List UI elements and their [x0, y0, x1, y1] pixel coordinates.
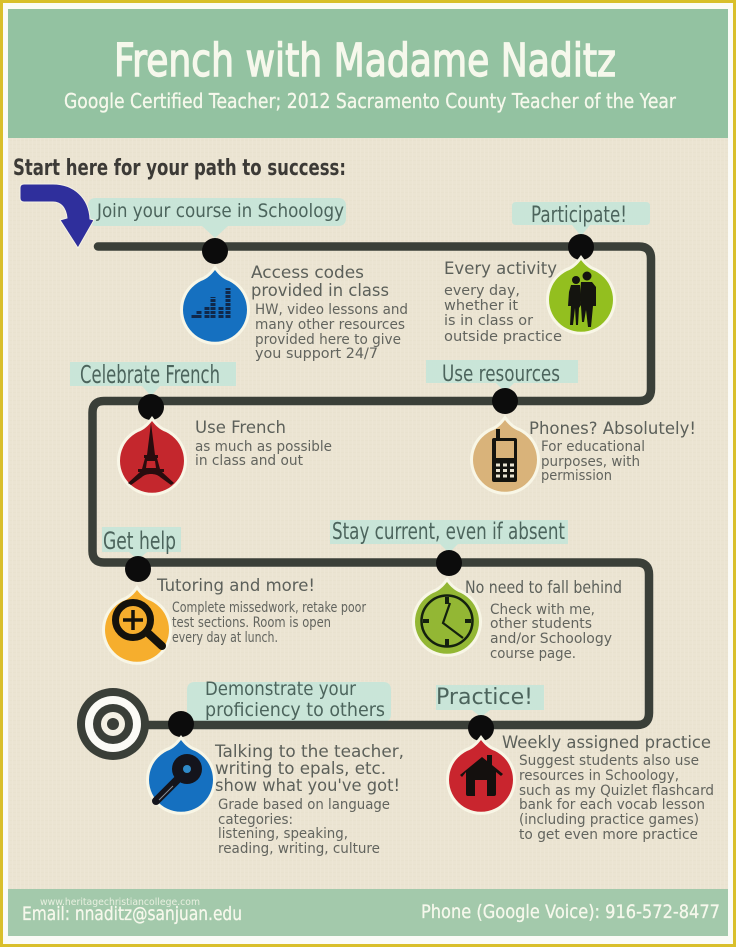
icon: house — [449, 740, 513, 812]
text: access codes: many other resources — [255, 317, 405, 333]
text: access codes: provided in class — [251, 281, 389, 301]
icon: eiffel tower — [120, 421, 184, 493]
footer banner — [8, 889, 728, 936]
text: tutoring: Tutoring and more! — [156, 576, 315, 596]
label: get help: Get help — [103, 527, 176, 555]
icon: people — [549, 260, 613, 332]
text: use french: Use French — [195, 418, 286, 438]
label: practice: Practice! — [436, 685, 533, 710]
icon: signal bars — [183, 270, 247, 342]
text: weekly practice: resources in Schoology, — [519, 768, 679, 784]
text: no need to fall behind: Check with me, — [490, 602, 595, 618]
label: join: Join your course in Schoology — [96, 200, 344, 222]
text: weekly practice: to get even more practice — [519, 827, 698, 843]
text: access codes: HW, video lessons and — [255, 302, 408, 318]
text: phones: Phones? Absolutely! — [529, 419, 696, 439]
text: phones — [529, 419, 696, 484]
label: resources: Use resources — [442, 362, 560, 387]
text: weekly practice: bank for each vocab lesson — [519, 797, 705, 813]
text: tutoring — [156, 576, 366, 646]
icon: target — [77, 688, 149, 760]
text: talking to the teacher — [214, 742, 404, 857]
header banner — [8, 9, 728, 138]
text: phones: For educational — [541, 439, 645, 455]
text: every activity: every day, — [444, 283, 520, 299]
text: tutoring: Complete missedwork, retake poor — [172, 600, 366, 616]
watermark: www.heritagechristiancollege.com — [40, 897, 200, 908]
text: every activity: outside practice — [444, 329, 562, 345]
text: no need to fall behind: other students — [490, 616, 592, 632]
text: every activity — [444, 259, 562, 345]
text: talking to the teacher: reading, writing, culture — [218, 841, 380, 857]
text: no need to fall behind: course page. — [490, 646, 576, 662]
start heading: Start here for your path to success: — [13, 156, 346, 181]
text: talking to the teacher: writing to epals, etc. — [215, 759, 386, 779]
text: tutoring: test sections. Room is open — [172, 615, 331, 631]
icon: magnifier — [105, 590, 169, 662]
text: tutoring: every day at lunch. — [172, 630, 278, 646]
text: talking to the teacher: Grade based on language — [218, 797, 390, 813]
icon: start arrow — [20, 184, 94, 248]
label: stay current: Stay current, even if absent — [332, 519, 565, 545]
text: talking to the teacher: listening, speaking, — [218, 826, 348, 842]
text: use french: as much as possible — [195, 439, 332, 455]
label: demonstrate: Demonstrate your — [205, 678, 356, 700]
icon: phone — [473, 420, 537, 492]
text: access codes: Access codes — [251, 263, 364, 283]
text: phones: purposes, with — [541, 454, 640, 470]
text: use french — [195, 418, 332, 469]
path line — [92, 246, 651, 725]
label: celebrate: Celebrate French — [80, 360, 220, 389]
text: use french: in class and out — [195, 453, 303, 469]
text: weekly practice — [502, 733, 714, 843]
text: talking to the teacher: categories: — [218, 812, 293, 828]
footer email: Email: nnaditz@sanjuan.edu — [22, 903, 242, 925]
label bubbles — [70, 198, 650, 729]
title: French with Madame Naditz — [114, 34, 616, 87]
text: talking to the teacher: Talking to the teacher, — [214, 742, 404, 762]
text: weekly practice: Suggest students also use — [519, 753, 699, 769]
text: no need to fall behind — [465, 578, 622, 662]
text: weekly practice: (including practice games) — [519, 812, 699, 828]
text: no need to fall behind: No need to fall behind — [465, 578, 622, 598]
text: talking to the teacher: show what you've got! — [215, 776, 400, 796]
text: weekly practice: Weekly assigned practice — [502, 733, 711, 753]
label: demonstrate: proficiency to others — [205, 699, 385, 721]
icon: clock — [415, 582, 479, 654]
icon: key — [149, 740, 213, 812]
text: every activity: whether it — [444, 298, 519, 314]
text: every activity: Every activity — [444, 259, 557, 279]
step dots — [125, 234, 594, 741]
label: participate: Participate! — [531, 203, 627, 228]
text: access codes: you support 24/7 — [255, 346, 378, 362]
text: no need to fall behind: and/or Schoology — [490, 631, 612, 647]
label: demonstrate — [205, 678, 385, 721]
text: access codes: provided here to give — [255, 332, 401, 348]
text: every activity: is in class or — [444, 313, 533, 329]
text: access codes — [251, 263, 408, 362]
text: weekly practice: such as my Quizlet flashcard — [519, 783, 714, 799]
text: phones: permission — [541, 468, 612, 484]
